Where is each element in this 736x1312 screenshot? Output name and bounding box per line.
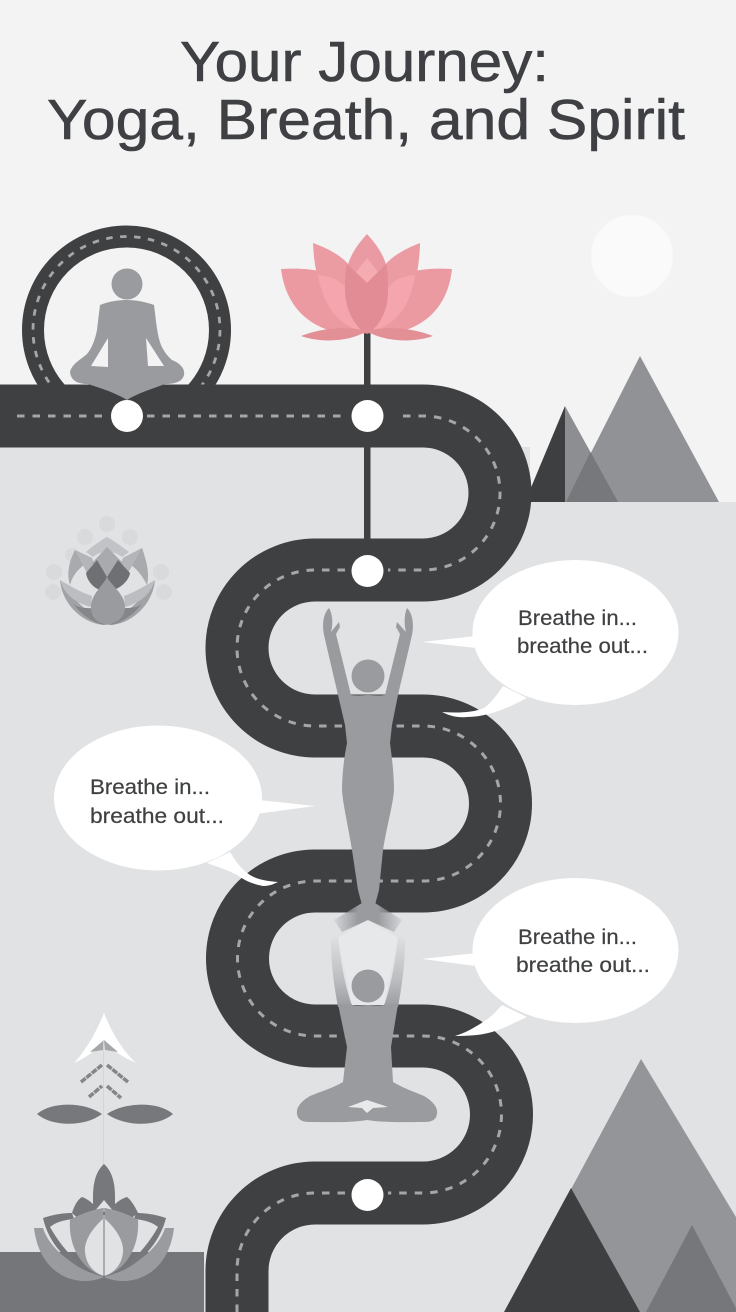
bubble text 3: Breathe in...: [518, 926, 637, 949]
icon: sun: [591, 215, 673, 297]
bubble text 1: breathe out...: [517, 635, 648, 658]
lotus stem: [364, 330, 370, 555]
road node markers: [111, 400, 384, 1211]
speech bubble 3: [422, 878, 678, 1036]
bubble text 3: breathe out...: [516, 954, 650, 977]
icon: faint lotus: [45, 516, 172, 625]
icon: pink lotus: [281, 234, 452, 340]
figure: seated with raised arms: [297, 920, 437, 1122]
icon: lower mountains: [504, 1059, 736, 1312]
title: Yoga, Breath, and Spirit: [47, 88, 685, 152]
icon: arrow and leaves: [37, 1013, 173, 1165]
icon: upper mountains: [525, 356, 719, 502]
bubble text 1: [517, 607, 648, 658]
title: Your Journey:: [180, 30, 549, 94]
bubble text 2: Breathe in...: [90, 776, 210, 799]
bubble text 2: breathe out...: [90, 805, 224, 828]
lower left band: [0, 1252, 204, 1312]
winding road: [0, 416, 502, 1312]
figure: seated meditator: [70, 268, 184, 400]
title: [47, 30, 685, 152]
bubble text 1: Breathe in...: [518, 607, 637, 630]
figure: standing with raised arms: [323, 608, 413, 932]
bubble text 3: [516, 926, 650, 977]
speech bubble 1: [422, 560, 678, 717]
bubble text 2: [90, 776, 224, 828]
speech bubble 2: [54, 726, 315, 886]
icon: ring road: [33, 236, 220, 424]
icon: bottom lotus: [34, 1164, 174, 1281]
